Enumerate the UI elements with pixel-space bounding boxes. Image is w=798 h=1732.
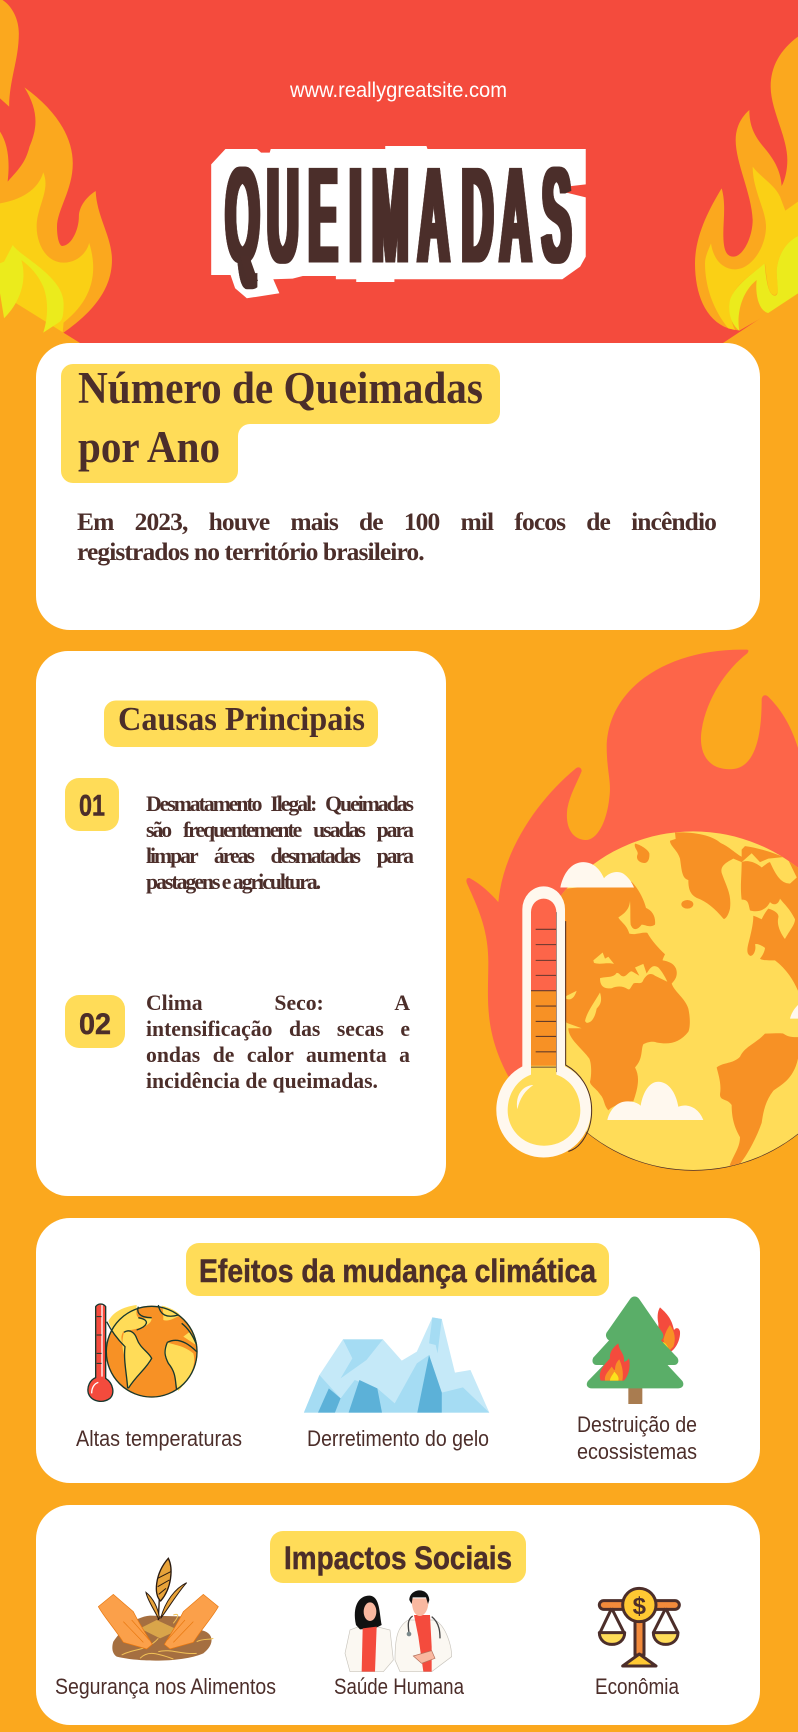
label: economia: Econômia bbox=[595, 1674, 680, 1699]
text block: clima seco bbox=[146, 991, 410, 1093]
label: seguranca nos alimentos: Segurança nos Alimentos bbox=[55, 1674, 276, 1699]
label: altas temperaturas: Altas temperaturas bbox=[76, 1426, 242, 1451]
text block: desmatamento ilegal: Desmatamento Ilegal: Queimadas bbox=[146, 792, 412, 816]
heading line two: por Ano bbox=[78, 422, 220, 472]
label: destruicao de ecossistemas: Destruição de bbox=[577, 1412, 697, 1437]
text block: clima seco: Clima Seco: A bbox=[146, 991, 410, 1015]
text block: desmatamento ilegal bbox=[146, 792, 414, 894]
heading badge bbox=[61, 364, 500, 483]
title text: QUEIMADAS bbox=[226, 141, 571, 292]
sticker background bbox=[211, 146, 586, 298]
icon: doctors bbox=[345, 1590, 452, 1672]
heading badge bbox=[186, 1243, 609, 1296]
number 02: 02 bbox=[79, 1008, 111, 1041]
thermometer bbox=[496, 886, 592, 1157]
text block: desmatamento ilegal: pastagens e agricultura. bbox=[146, 870, 319, 894]
left flames bbox=[0, 0, 112, 347]
right flames bbox=[695, 37, 798, 345]
text block: focos de incendio bbox=[77, 507, 716, 566]
label: derretimento do gelo: Derretimento do gelo bbox=[307, 1426, 489, 1451]
text block: desmatamento ilegal: são frequentemente usadas para bbox=[146, 818, 412, 842]
label: saude humana: Saúde Humana bbox=[334, 1674, 465, 1699]
icon: balance with dollar bbox=[599, 1588, 679, 1666]
big flame bbox=[466, 650, 798, 1094]
icon: iceberg bbox=[304, 1317, 489, 1413]
icon: balance with dollar: $ bbox=[633, 1593, 646, 1620]
heading text: Impactos Sociais bbox=[284, 1540, 512, 1576]
panel: causas principais bbox=[36, 651, 446, 1196]
label: destruicao de ecossistemas bbox=[577, 1412, 697, 1464]
website url: www.reallygreatsite.com bbox=[289, 78, 507, 102]
heading badge bbox=[270, 1531, 526, 1583]
illustration: burning earth and thermometer bbox=[466, 650, 798, 1171]
text block: desmatamento ilegal: limpar áreas desmatadas para bbox=[146, 844, 412, 868]
title sticker bbox=[211, 141, 586, 298]
clouds bbox=[560, 862, 798, 1120]
icon: thermometer and globe bbox=[88, 1304, 198, 1401]
text block: focos de incendio: registrados no território brasileiro. bbox=[77, 537, 424, 566]
earth shadow outline bbox=[524, 832, 798, 1171]
header band bbox=[0, 0, 798, 343]
earth bbox=[524, 831, 798, 1170]
heading text: Efeitos da mudança climática bbox=[199, 1253, 596, 1289]
text block: focos de incendio: Em 2023, houve mais de 100 mil focos de incêndio bbox=[77, 507, 716, 536]
text block: clima seco: ondas de calor aumenta a bbox=[146, 1043, 410, 1067]
panel: impactos sociais bbox=[36, 1505, 760, 1725]
number 01: 01 bbox=[79, 790, 105, 822]
yellow seas bbox=[566, 952, 667, 1023]
text block: clima seco: incidência de queimadas. bbox=[146, 1069, 378, 1093]
panel: efeitos da mudanca climatica bbox=[36, 1218, 760, 1483]
label: destruicao de ecossistemas: ecossistemas bbox=[577, 1439, 697, 1464]
icon: burning tree bbox=[588, 1297, 682, 1404]
icon: hands with wheat bbox=[98, 1558, 218, 1661]
heading line one: Número de Queimadas bbox=[78, 363, 483, 413]
heading badge bbox=[104, 700, 378, 747]
Q tail bbox=[240, 257, 258, 282]
number badge 01 bbox=[65, 778, 119, 831]
heading text: Causas Principais bbox=[118, 701, 365, 738]
panel: numero de queimadas bbox=[36, 343, 760, 630]
number badge 02 bbox=[65, 995, 125, 1048]
text block: clima seco: intensificação das secas e bbox=[146, 1017, 410, 1041]
continents bbox=[553, 832, 798, 1166]
